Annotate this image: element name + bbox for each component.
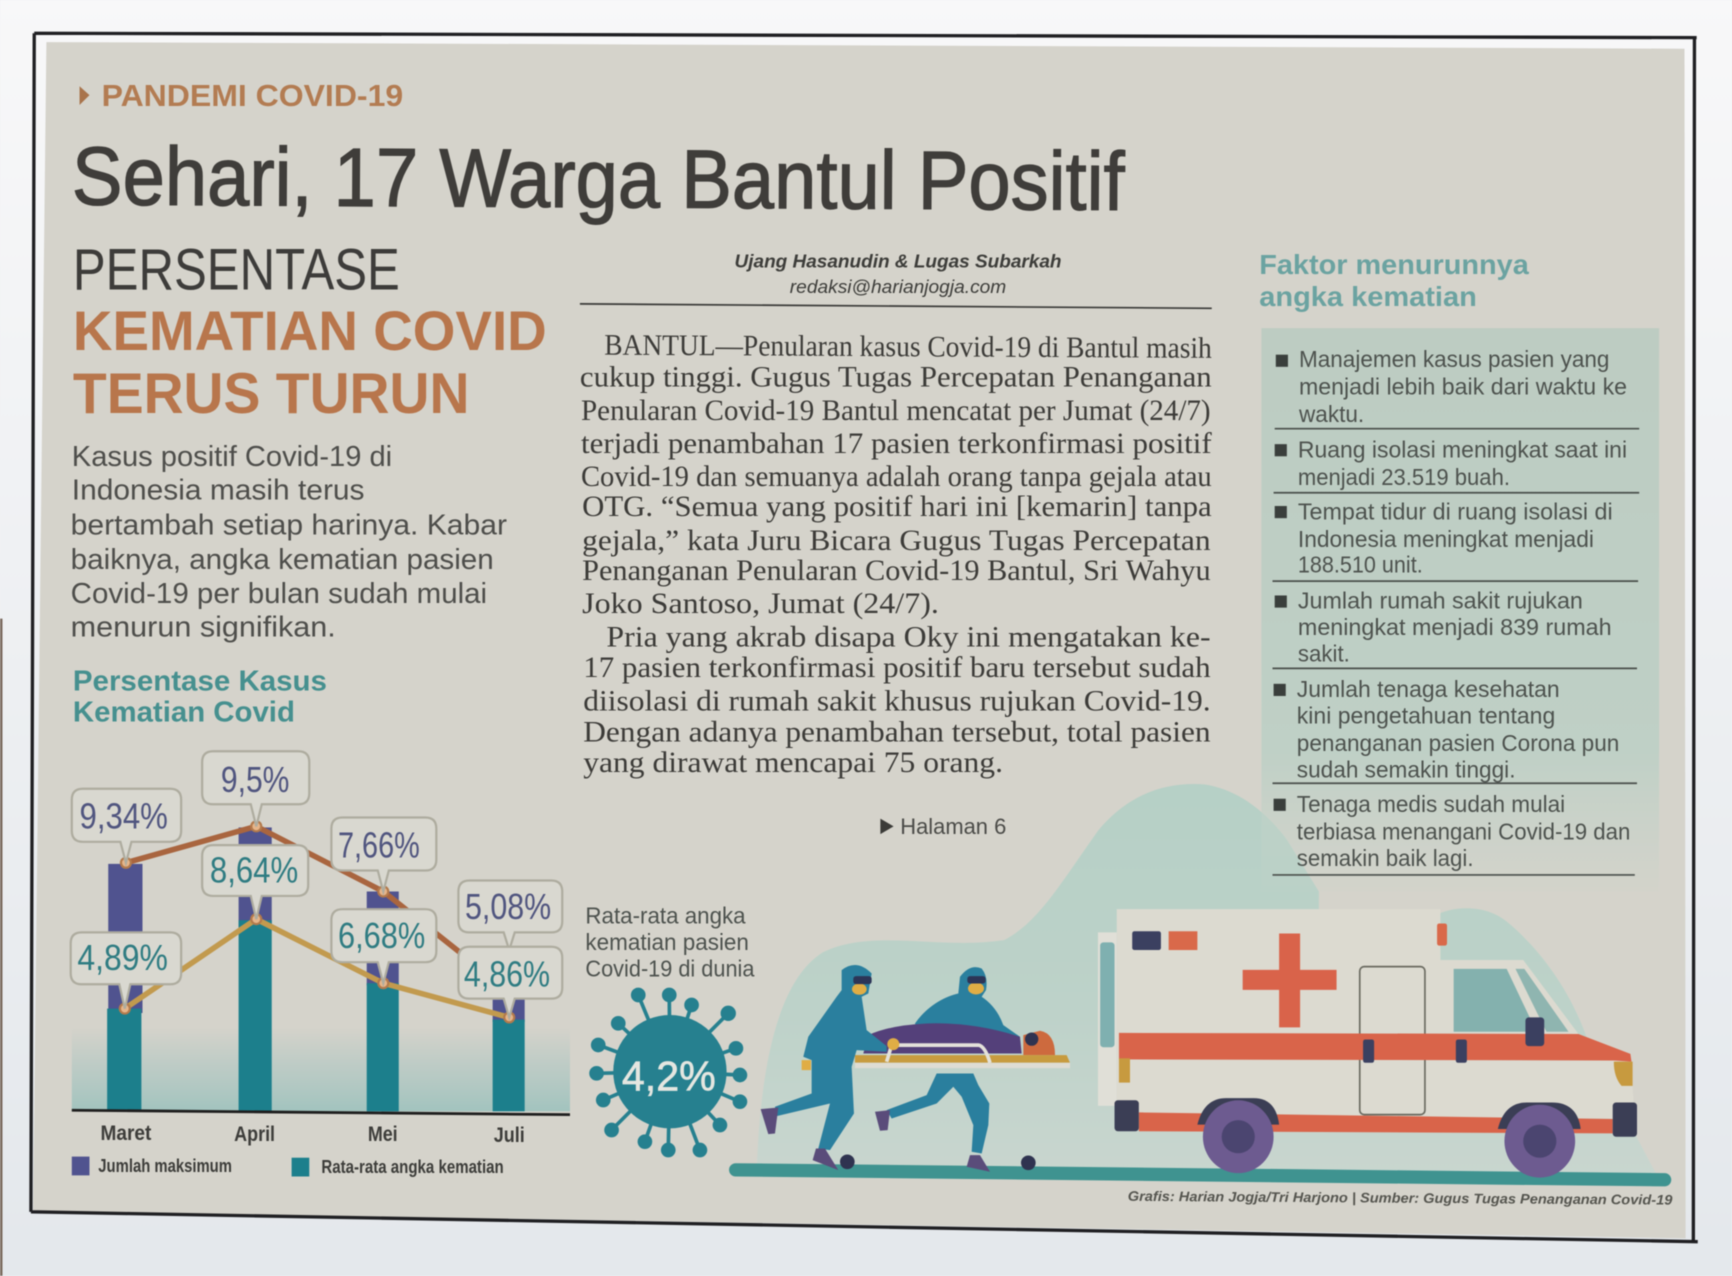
list items: sakit. [1298,641,1350,667]
value labels: 6,68% [338,915,425,956]
value labels: 4,86% [464,953,550,994]
text block: article: Penularan Covid-19 Bantul mencatat per Jumat (24/7) [581,394,1211,427]
text block: intro: Kasus positif Covid-19 di [72,441,392,473]
text block: intro: bertambah setiap harinya. Kabar [71,510,507,542]
list items: Ruang isolasi meningkat saat ini [1298,436,1627,462]
line markers [120,821,514,1022]
text block: world average: kematian pasien [585,929,749,955]
list items: sudah semakin tinggi. [1297,757,1516,783]
month labels [101,1122,525,1147]
list items: 188.510 unit. [1298,551,1423,577]
value labels: 9,5% [221,759,289,800]
text block: article: Pria yang akrab disapa Oky ini mengatakan ke- [606,620,1211,653]
panel background [1261,328,1659,892]
list items: menjadi lebih baik dari waktu ke [1299,373,1627,399]
bumpers [1115,1100,1139,1131]
patient on stretcher [855,1023,1070,1068]
value labels: 4,89% [77,937,168,978]
list items: menjadi 23.519 buah. [1298,464,1510,490]
legend [72,1155,504,1177]
icon: virus 4,2%: 4,2% [622,1052,716,1099]
panel heading: angka kematian [1259,281,1477,312]
mustard accents [1614,1062,1633,1086]
text block: intro: menurun signifikan. [71,611,336,643]
list items: Jumlah tenaga kesehatan [1297,676,1560,702]
front wheel [1498,1102,1581,1178]
text block: article: BANTUL—Penularan kasus Covid-19 di Bantul masih [604,329,1212,365]
text block: article: cukup tinggi. Gugus Tugas Percepatan Penanganan [580,361,1212,394]
red cross [1243,933,1337,1027]
line: rata-rata [125,919,509,1017]
month labels: April [234,1123,275,1146]
text block: article: Dengan adanya penambahan tersebut, total pasien [583,715,1211,748]
list items: waktu. [1298,401,1364,427]
medic front [761,965,899,1170]
axis [72,1110,570,1115]
value labels [77,759,551,994]
text block: article: gejala,” kata Juru Bicara Gugus Tugas Percepatan [582,524,1211,557]
text block: intro: baiknya, angka kematian pasien [71,544,494,576]
month labels: Juli [494,1124,525,1147]
icon: virus 4,2% [589,988,747,1157]
month labels: Mei [368,1123,398,1146]
line: jumlah maksimum [126,826,464,956]
text block: world average [585,903,755,982]
text block: article: yang dirawat mencapai 75 orang. [583,746,1003,779]
chart: persentase kasus kematian [71,751,570,1177]
kicker: Pandemi Covid-19: PANDEMI COVID-19 [102,78,403,113]
list items: Tenaga medis sudah mulai [1297,791,1565,817]
byline: Ujang Hasanudin & Lugas Subarkah [735,250,1062,271]
chart heading: Kematian Covid [73,696,295,728]
text block: world average: Covid-19 di dunia [585,956,755,982]
text block: world average: Rata-rata angka [585,903,746,929]
month labels: Maret [101,1122,151,1145]
list items: semakin baik lagi. [1297,845,1474,871]
bars: rata-rata angka kematian [107,920,525,1111]
credits: Grafis: Harian Jogja/Tri Harjono | Sumber: Gugus Tugas Penanganan Covid-19 [1128,1189,1673,1208]
value bubbles [71,751,562,1017]
text block: intro: Covid-19 per bulan sudah mulai [71,578,487,610]
value labels: 7,66% [338,824,420,865]
text block: article: Covid-19 dan semuanya adalah orang tanpa gejala atau [581,460,1212,493]
list items: terbiasa menangani Covid-19 dan [1297,819,1630,845]
text block: article: diisolasi di rumah sakit khusus rujukan Covid-19. [583,684,1211,717]
text block: article: Joko Santoso, Jumat (24/7). [582,587,939,620]
byline [580,250,1212,308]
text block: article: OTG. “Semua yang positif hari ini [kemarin] tanpa [582,490,1212,523]
illustration: ambulance [1098,909,1637,1178]
link: halaman 6: Halaman 6 [900,814,1006,839]
list items [1297,346,1630,871]
legend: Rata-rata angka kematian [321,1156,504,1177]
text block: article: 17 pasien terkonfirmasi positif baru tersebut sudah [583,651,1211,684]
legend: Jumlah maksimum [98,1155,232,1176]
list items: meningkat menjadi 839 rumah [1298,614,1612,640]
chart heading [73,665,327,728]
rear door [1098,932,1117,1106]
rear wheel [1197,1098,1279,1173]
ground line [736,1170,1665,1180]
list items: Indonesia meningkat menjadi [1298,526,1594,552]
door outline [1360,967,1425,1115]
lower stripe [1139,1112,1613,1133]
text block: article: terjadi penambahan 17 pasien terkonfirmasi positif [581,427,1212,460]
heading: persentase kematian covid: KEMATIAN COVID [73,300,547,362]
text block: intro [71,441,507,643]
panel: faktor menurunnya angka kematian [1259,249,1659,892]
stretcher wheels [840,1154,1036,1170]
mirror and handles [1363,1017,1544,1063]
text block: intro: Indonesia masih terus [72,474,365,506]
list items: Manajemen kasus pasien yang [1299,346,1609,372]
title: Sehari, 17 Warga Bantul Positif [72,129,1126,228]
list items: kini pengetahuan tentang [1297,703,1555,729]
panel heading: Faktor menurunnya [1259,249,1529,280]
heading: persentase kematian covid [73,238,547,426]
medic rear [875,967,1020,1172]
text block: article: Penanganan Penularan Covid-19 Bantul, Sri Wahyu [582,554,1211,587]
background hills [757,784,1657,1175]
heading: persentase kematian covid: PERSENTASE [73,238,400,303]
chart heading: Persentase Kasus [73,665,327,697]
byline: redaksi@harianjogja.com [790,276,1006,297]
cab window [1454,969,1536,1032]
text block: article [580,329,1212,779]
top markers [1132,931,1161,950]
list items: Tempat tidur di ruang isolasi di [1298,498,1613,524]
windshield [1516,969,1569,1032]
bars: jumlah maksimum [108,827,525,1022]
value labels: 8,64% [210,850,298,891]
rear window [1100,942,1115,1047]
value labels: 5,08% [465,886,551,927]
orange stripe [1119,1033,1631,1062]
value labels: 9,34% [80,796,168,837]
heading: persentase kematian covid: TERUS TURUN [73,362,469,426]
illustration: medics with stretcher [761,965,1070,1172]
panel heading [1259,249,1529,312]
list items: Jumlah rumah sakit rujukan [1298,588,1583,614]
ambulance body [1117,909,1635,1119]
list items: penanganan pasien Corona pun [1297,730,1619,756]
bullet squares [1274,355,1288,811]
